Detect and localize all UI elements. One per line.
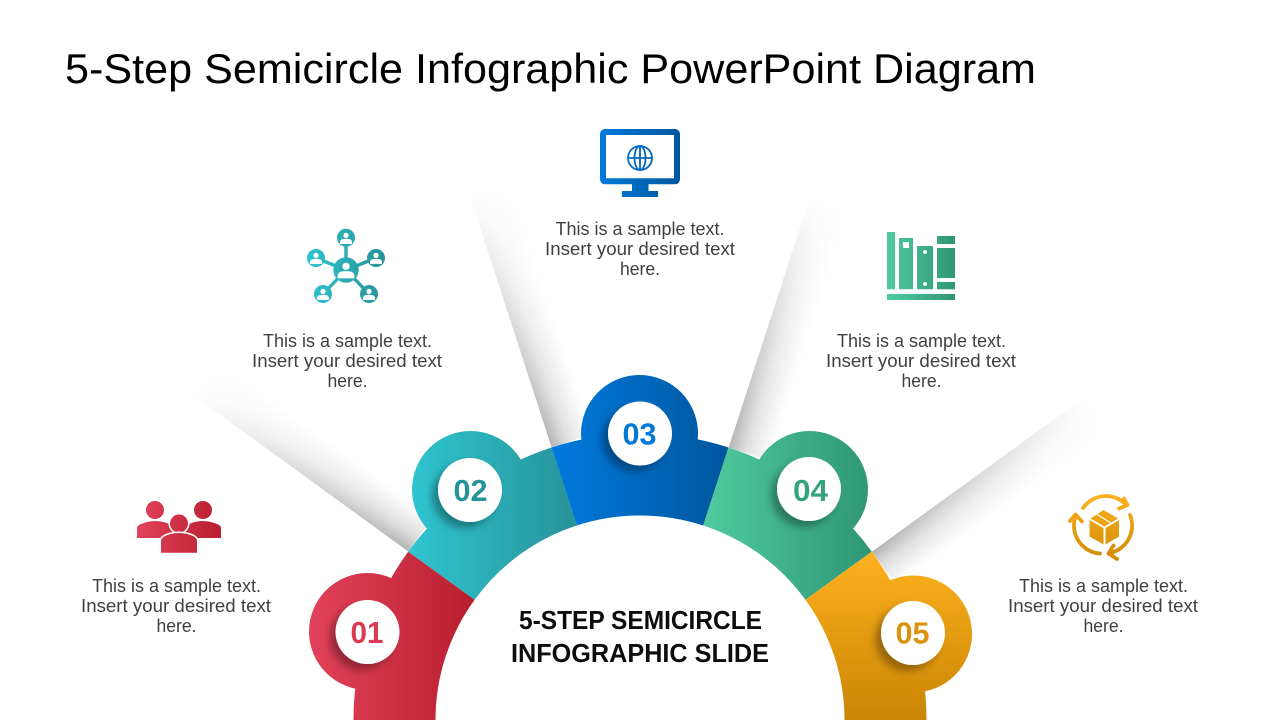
text block 05: This is a sample text. xyxy=(1019,576,1188,596)
centre heading: INFOGRAPHIC SLIDE xyxy=(511,640,769,668)
text block 02: here. xyxy=(328,371,368,391)
text block 03: Insert your desired text xyxy=(545,239,735,259)
number 03: 03 xyxy=(622,416,656,452)
icon: box with cycle arrows xyxy=(1070,496,1132,559)
radial shadow beams xyxy=(194,182,1111,586)
text block 02 xyxy=(252,331,442,391)
text block 05: Insert your desired text xyxy=(1008,596,1198,616)
text block 01: here. xyxy=(156,616,196,636)
text block 05 xyxy=(1008,576,1198,636)
number 05: 05 xyxy=(896,616,930,650)
text block 02: Insert your desired text xyxy=(252,351,442,371)
text block 01: This is a sample text. xyxy=(92,576,261,596)
title: 5-Step Semicircle Infographic PowerPoint Diagram xyxy=(65,45,1036,92)
number 04: 04 xyxy=(793,473,829,508)
text block 01 xyxy=(81,576,271,636)
text block 03 xyxy=(545,219,735,279)
segment 04: green xyxy=(703,431,872,600)
text block 01: Insert your desired text xyxy=(81,596,271,616)
number 02: 02 xyxy=(454,473,488,508)
segment 01: red xyxy=(309,552,475,720)
text block 05: here. xyxy=(1084,616,1124,636)
text block 03: This is a sample text. xyxy=(556,219,724,239)
icon: people network xyxy=(307,229,385,303)
text block 04: Insert your desired text xyxy=(826,351,1016,371)
segment 03: blue xyxy=(552,375,728,526)
number 01: 01 xyxy=(350,615,384,650)
centre heading xyxy=(511,607,769,668)
text block 04: This is a sample text. xyxy=(837,331,1006,351)
text block 03: here. xyxy=(620,259,660,279)
centre heading: 5-STEP SEMICIRCLE xyxy=(519,607,762,635)
text block 04 xyxy=(826,331,1016,391)
icon: monitor with globe xyxy=(603,132,677,197)
segment 05: amber xyxy=(805,552,972,720)
segment 02: teal xyxy=(408,431,577,600)
icon: books on a shelf xyxy=(887,232,955,300)
icon: people group xyxy=(137,501,221,553)
text block 04: here. xyxy=(902,371,942,391)
text block 02: This is a sample text. xyxy=(263,331,432,351)
